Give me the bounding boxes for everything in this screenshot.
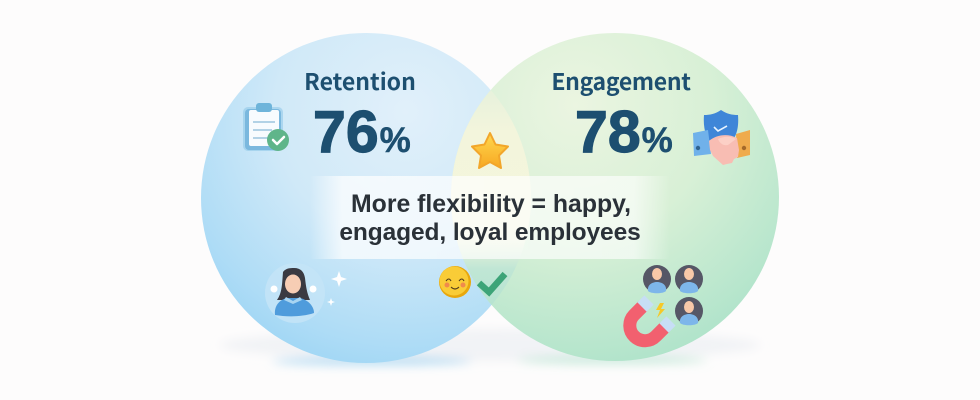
panel: engagement circle [451,33,779,361]
panel: overlap lens [451,91,530,304]
icon: shield and handshake [693,110,750,165]
callout: banner [310,176,670,259]
icon: smiley [439,266,471,298]
circle shadows [220,329,760,365]
callout text: More flexibility = happy, [351,191,631,218]
icon: people and magnet [630,265,703,341]
heading: engagement: Engagement [551,63,691,97]
icon: employee avatar [265,263,325,323]
icon: star [472,133,508,168]
callout text: engaged, loyal employees [339,219,641,246]
panel: retention circle [201,33,531,363]
stat: 78%: 78% [575,99,673,165]
stat: 76%: 76% [313,99,411,165]
icon: clipboard with check [243,103,289,151]
icon: checkmark [479,274,505,292]
heading: retention: Retention [304,63,416,97]
icon: sparkles [327,271,347,306]
